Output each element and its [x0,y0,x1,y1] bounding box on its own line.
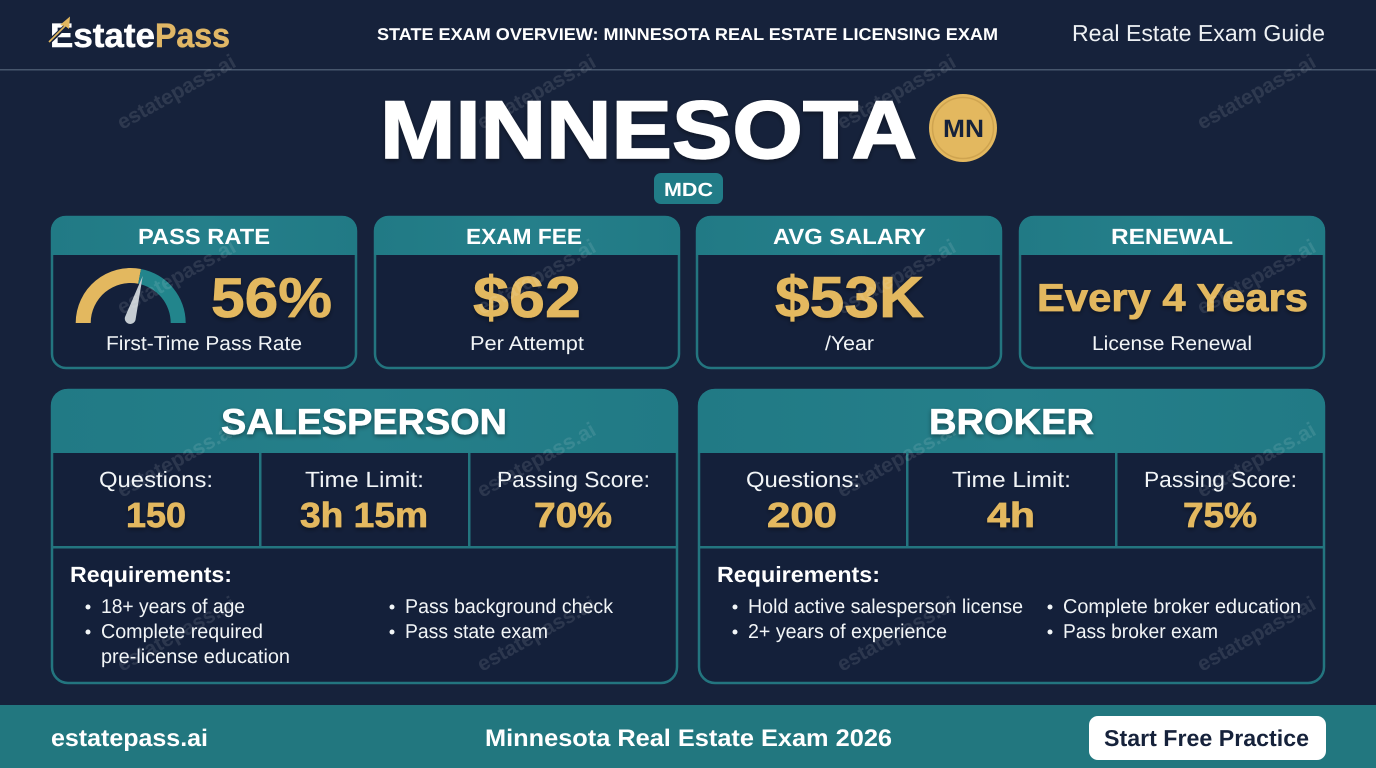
stat: questions: Questions: [746,467,860,492]
watermarks: estatepass.ai [833,50,960,134]
logo: EstatePass: Pass [155,17,230,55]
requirements list: Requirements: [70,562,232,587]
button: start free practice [1089,716,1326,760]
tag: MDC: MDC [664,180,713,201]
stat: questions [746,467,860,535]
requirements list: Pass background check [405,596,614,618]
stat: time limit: 4h [987,496,1035,535]
requirements list: Pass state exam [405,621,548,643]
watermarks: estatepass.ai [113,592,240,676]
watermarks: estatepass.ai [1193,418,1320,502]
stat: passing score: 70% [534,496,612,535]
watermarks: estatepass.ai [113,235,240,319]
requirements list: 2+ years of experience [748,621,947,643]
watermarks: estatepass.ai [473,235,600,319]
stat: questions: Questions: [99,467,213,492]
footer bar [0,705,1376,768]
stat: time limit [300,467,428,535]
state badge: MN: MN [943,115,984,143]
stat: time limit: 3h 15m [300,496,428,535]
watermarks: estatepass.ai [113,418,240,502]
tag: MDC [654,173,723,204]
requirements list: Complete broker education [1063,596,1301,618]
requirements list: Hold active salesperson license [748,596,1023,618]
heading: broker: BROKER [929,401,1094,442]
stat: time limit: Time Limit: [305,467,424,492]
watermarks: estatepass.ai [833,592,960,676]
watermarks: estatepass.ai [1193,50,1320,134]
heading: salesperson: SALESPERSON [221,401,507,442]
watermarks: estatepass.ai [833,235,960,319]
stat: questions: 200 [767,496,837,535]
heading: exam fee: EXAM FEE [466,224,582,249]
caption: License Renewal [1092,333,1252,355]
panel: broker [698,389,1325,683]
gauge: 56 percent [76,268,186,324]
stat: time limit: Time Limit: [952,467,1071,492]
footer site name: estatepass.ai [51,725,208,752]
logo: EstatePass: Estate [50,17,155,55]
watermarks: estatepass.ai [1193,235,1320,319]
caption: /Year [825,333,874,355]
watermarks [113,50,1320,676]
footer title: Minnesota Real Estate Exam 2026 [485,725,892,752]
requirements list: 18+ years of age [101,596,245,618]
stat: passing score: Passing Score: [1144,467,1297,492]
header guide label: Real Estate Exam Guide [1072,20,1325,46]
watermarks: estatepass.ai [113,50,240,134]
logo: EstatePass [48,16,230,55]
caption: Per Attempt [470,333,584,355]
panel: renewal [1019,216,1325,368]
requirements list: pre-license education [101,646,290,668]
stat: questions [99,467,213,535]
value: every 4 years: Every 4 Years [1037,277,1308,320]
watermarks: estatepass.ai [473,50,600,134]
value: 56%: 56% [211,266,332,329]
stat: passing score: 75% [1183,496,1257,535]
stat: passing score [497,467,650,535]
value: $62: $62 [473,265,581,330]
panel: average salary [696,216,1002,368]
stat: passing score: Passing Score: [497,467,650,492]
panel: salesperson [51,389,678,683]
requirements list [717,562,1301,643]
header title: STATE EXAM OVERVIEW: MINNESOTA REAL ESTATE LICENSING EXAM [377,25,998,44]
heading: pass rate: PASS RATE [138,224,270,249]
requirements list: Complete required [101,621,263,643]
requirements list: Pass broker exam [1063,621,1218,643]
watermarks: estatepass.ai [833,418,960,502]
stat: questions: 150 [126,496,186,535]
main heading: Minnesota: MINNESOTA [380,85,917,176]
caption: First-Time Pass Rate [106,333,302,355]
panel: exam fee [374,216,680,368]
requirements list: Requirements: [717,562,880,587]
stat: passing score [1144,467,1297,535]
top header divider [0,69,1376,70]
heading: avg salary: AVG SALARY [773,224,926,249]
stat: time limit [952,467,1071,535]
state badge: MN [929,94,997,162]
watermarks: estatepass.ai [1193,592,1320,676]
value: $53K: $53K [775,265,924,330]
button: start free practice: Start Free Practice [1104,725,1309,751]
panel: pass rate [51,216,357,368]
watermarks: estatepass.ai [473,592,600,676]
watermarks: estatepass.ai [473,418,600,502]
heading: renewal: RENEWAL [1111,224,1233,249]
requirements list [70,562,614,668]
